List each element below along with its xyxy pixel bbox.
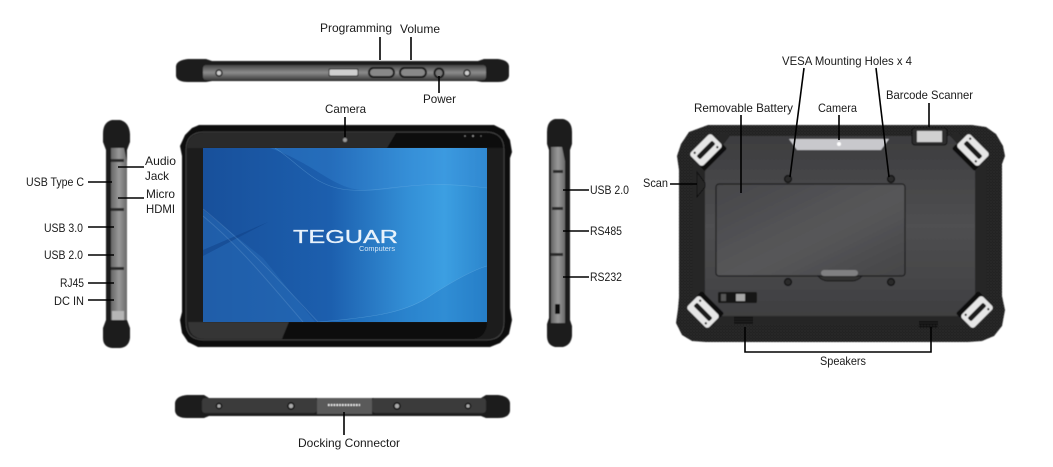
speaker grille left <box>734 317 753 324</box>
label: Docking Connector: Docking Connector <box>298 436 400 450</box>
battery cover <box>716 184 905 276</box>
label: VESA Mounting Holes x 4: VESA Mounting Holes x 4 <box>782 54 912 68</box>
corner brackets <box>688 132 727 171</box>
label: Camera (back): Camera <box>818 101 857 115</box>
top edge view of tablet <box>176 59 509 82</box>
camera strip <box>789 139 889 150</box>
label: DC IN <box>54 294 114 308</box>
logo: TEGUAR Computers: Computers <box>359 246 396 253</box>
tablet screen wallpaper <box>203 148 487 322</box>
back panel <box>705 136 978 316</box>
mode switch <box>718 292 757 303</box>
label: RS232: RS232 <box>590 270 622 284</box>
tablet body and bezel <box>180 125 512 347</box>
label: Programming: Programming <box>320 21 392 35</box>
battery latch <box>818 276 862 281</box>
scan button <box>697 172 705 197</box>
label: Speakers: Speakers <box>820 354 866 368</box>
label: Programming <box>320 21 392 60</box>
smooth inner rim <box>692 133 987 326</box>
logo: TEGUAR Computers <box>293 230 398 252</box>
VESA screws <box>784 176 894 286</box>
label: RJ45: RJ45 <box>60 276 84 290</box>
label: Scan: Scan <box>643 176 668 190</box>
label: RS485 <box>563 224 622 238</box>
label: Audio Jack: Jack <box>145 169 170 183</box>
label: Micro HDMI <box>118 187 175 216</box>
label: USB 3.0 <box>44 221 114 235</box>
label: USB Type C: USB Type C <box>26 175 84 189</box>
label: Camera (front): Camera <box>325 102 366 116</box>
label: VESA Mounting Holes x 4 <box>782 54 912 177</box>
label: Audio Jack: Audio <box>145 154 176 168</box>
label: Power: Power <box>423 92 456 106</box>
label: Micro HDMI: Micro <box>146 187 175 201</box>
label: Removable Battery <box>694 101 793 193</box>
label: RS232 <box>563 270 622 284</box>
label: Barcode Scanner: Barcode Scanner <box>886 88 973 102</box>
label: RJ45 <box>60 276 114 290</box>
label: Volume <box>400 22 440 60</box>
label: USB 2.0 (right) <box>563 183 629 197</box>
label: Docking Connector <box>298 412 400 450</box>
label: Micro HDMI: HDMI <box>146 202 175 216</box>
label: USB 2.0 (right): USB 2.0 <box>590 183 629 197</box>
front view of tablet <box>180 125 512 347</box>
label: Volume: Volume <box>400 22 440 36</box>
label: USB 3.0: USB 3.0 <box>44 221 83 235</box>
label: Camera (back) <box>818 101 857 140</box>
label: Speakers <box>745 327 931 368</box>
label: USB 2.0 <box>44 248 114 262</box>
back body <box>676 125 1005 342</box>
label: Removable Battery: Removable Battery <box>694 101 793 115</box>
logo: TEGUAR Computers: TEGUAR <box>293 227 398 247</box>
label: Power <box>423 76 456 106</box>
label: Camera (front) <box>325 102 366 137</box>
label: Scan <box>643 176 697 190</box>
bottom edge view of tablet <box>175 395 510 418</box>
label: DC IN: DC IN <box>54 294 84 308</box>
back view of tablet <box>676 125 1005 342</box>
left edge view of tablet <box>103 120 130 348</box>
label: USB 2.0: USB 2.0 <box>44 248 83 262</box>
speaker grille right <box>919 321 938 328</box>
top and bottom textured bands <box>716 129 966 336</box>
barcode scanner window <box>912 128 947 145</box>
right edge view of tablet <box>547 119 572 347</box>
label: Barcode Scanner <box>886 88 973 127</box>
label: RS485: RS485 <box>590 224 622 238</box>
label: Audio Jack <box>118 154 176 183</box>
